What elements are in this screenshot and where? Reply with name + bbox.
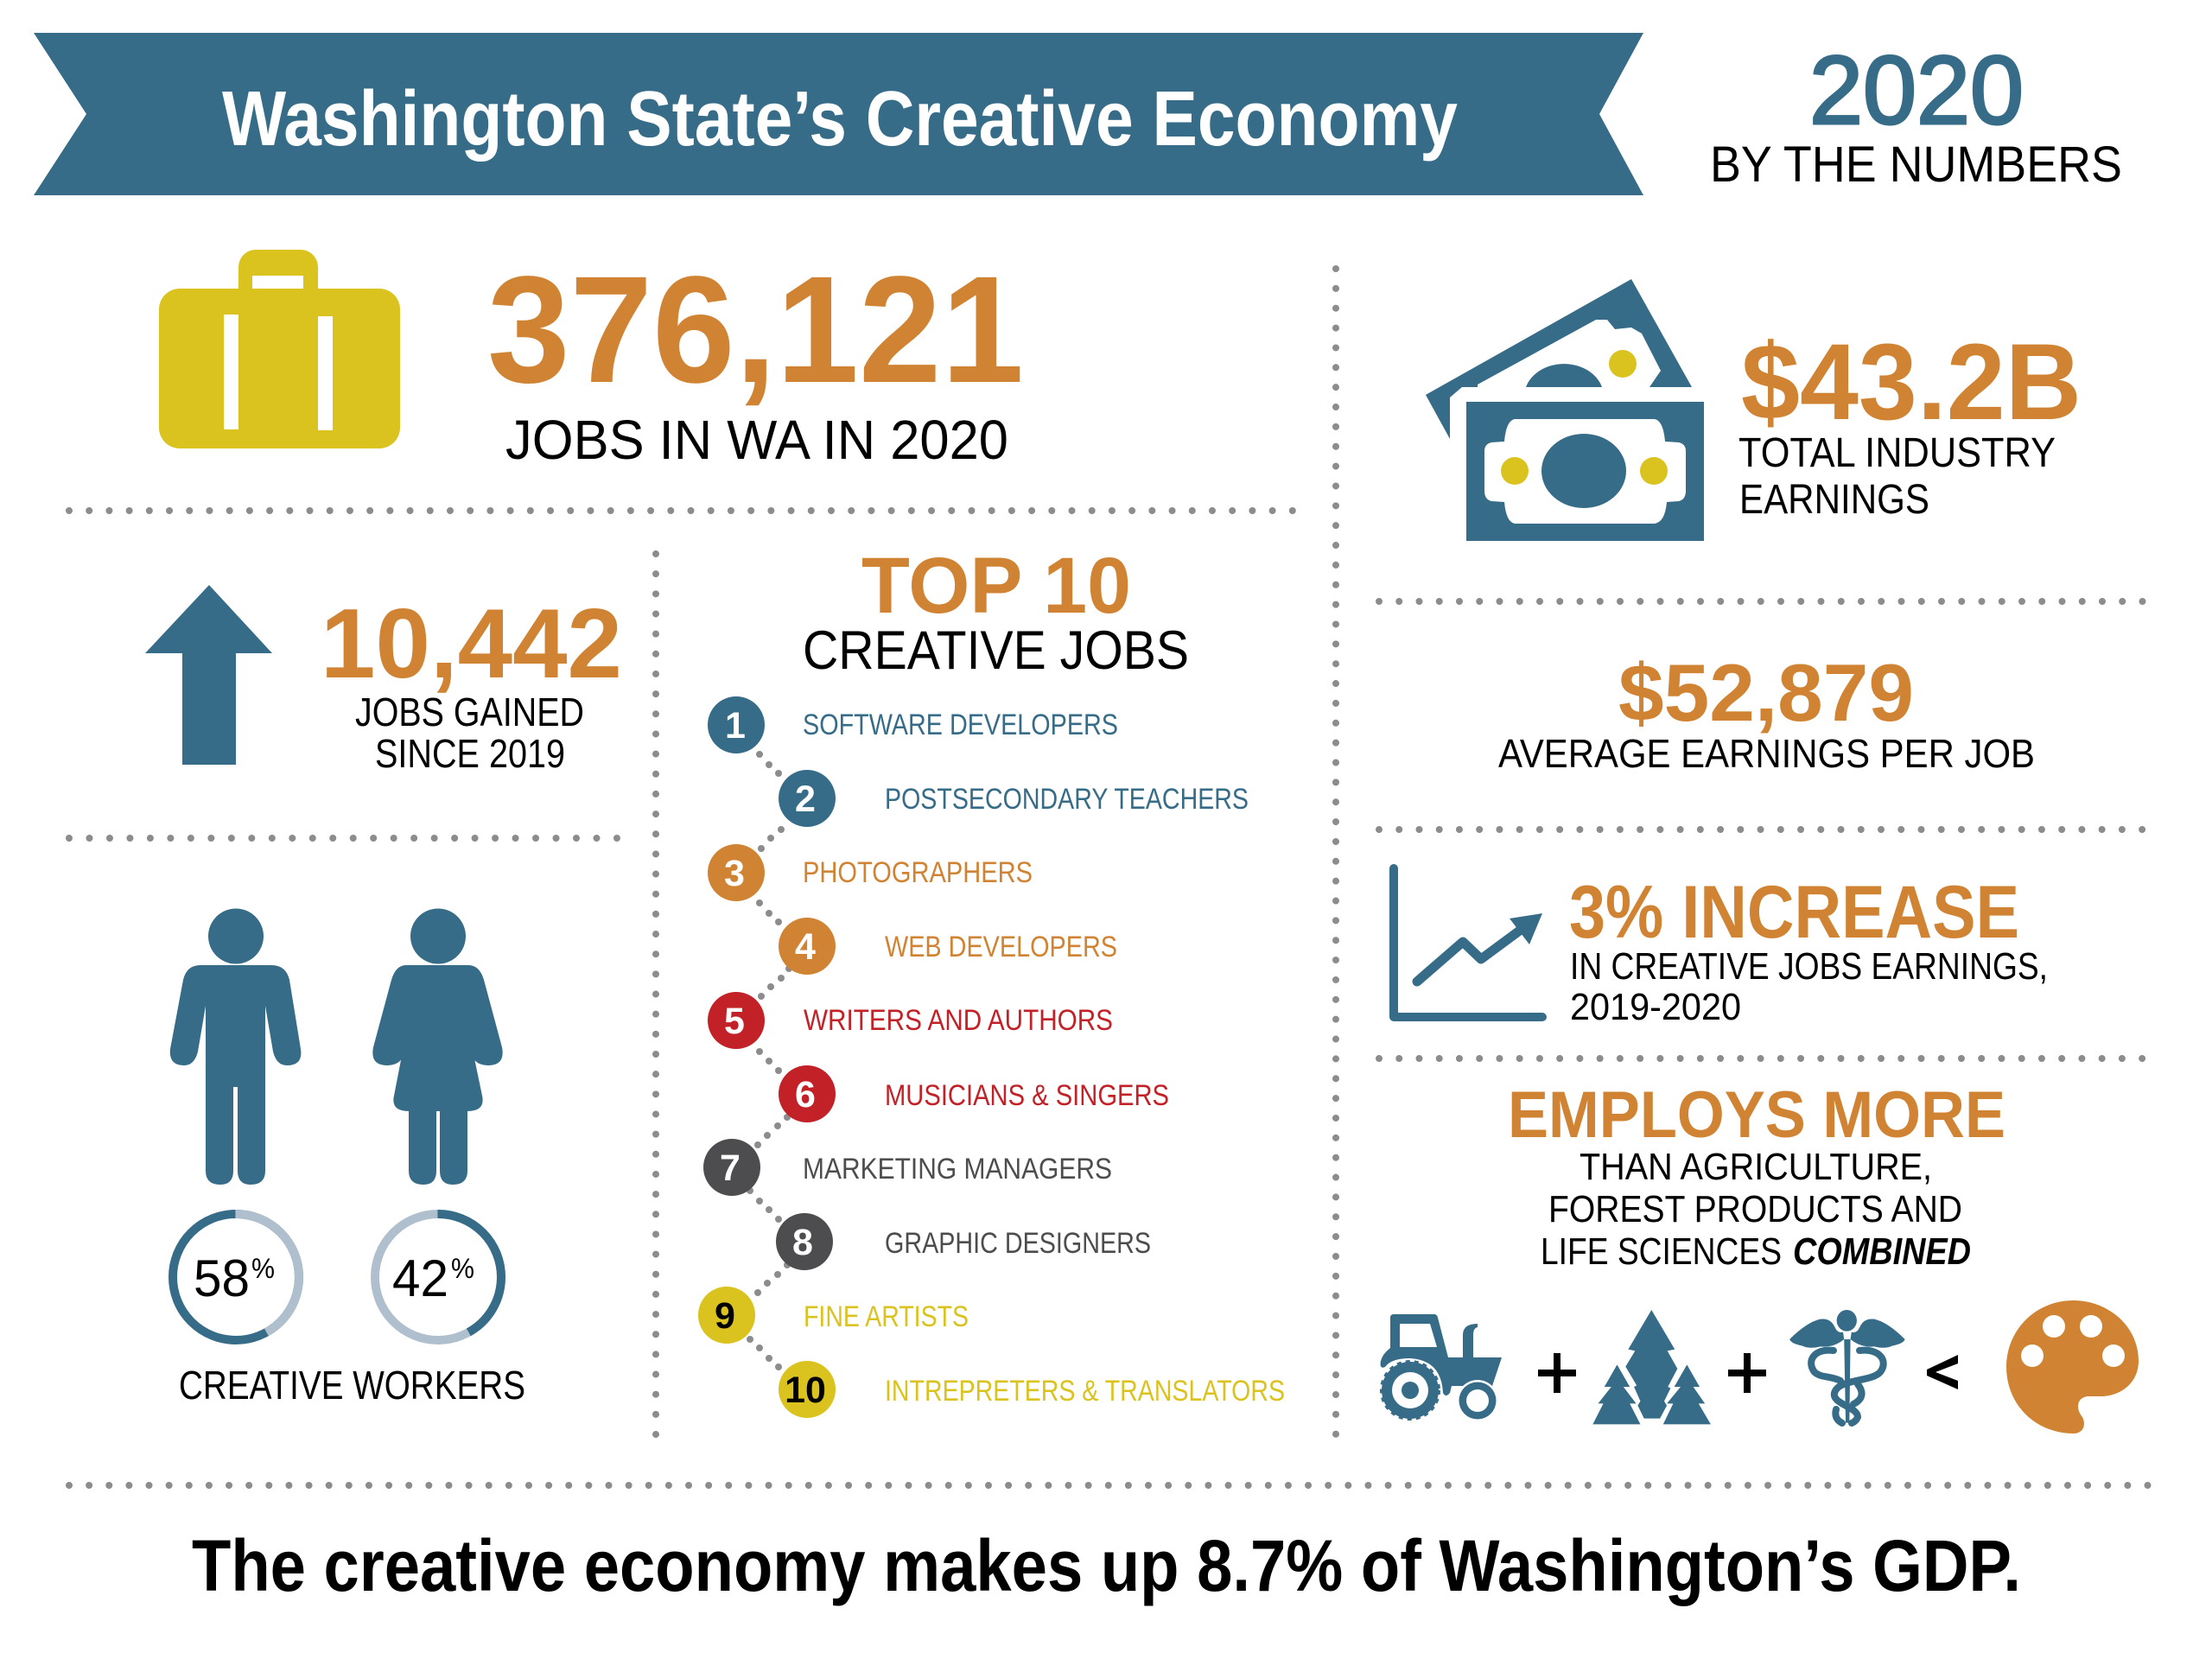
list item 9: 9 (715, 1295, 735, 1337)
list item 10 (779, 1361, 1285, 1418)
icon: tractor (1381, 1314, 1502, 1421)
list item 2 (779, 770, 1249, 827)
stat: total industry earnings: TOTAL INDUSTRY (1738, 430, 2056, 476)
text block: employs more: COMBINED (1793, 1230, 1971, 1273)
stat: 3 percent increase (1569, 871, 2048, 1028)
stat: jobs in WA: 376,121 (487, 245, 1024, 415)
text block: employs more: EMPLOYS MORE (1508, 1078, 2005, 1152)
text block: employs more: FOREST PRODUCTS AND (1548, 1188, 1962, 1230)
stat: average earnings per job: $52,879 (1618, 647, 1914, 738)
list item 7: MARKETING MANAGERS (803, 1153, 1112, 1185)
list item 10: INTREPRETERS & TRANSLATORS (885, 1375, 1285, 1408)
heading: top 10 creative jobs: CREATIVE JOBS (803, 620, 1189, 681)
connector dots for ranked list (747, 751, 792, 1370)
footer statement: The creative economy makes up 8.7% of Washington’s GDP. (192, 1525, 2021, 1606)
list item 6: 6 (795, 1074, 816, 1116)
icon: caduceus (1789, 1310, 1905, 1423)
list item 3: 3 (724, 853, 745, 894)
donut: 58 percent (173, 1214, 299, 1340)
list item 4: 4 (795, 926, 816, 968)
text block: employs more (1508, 1078, 2005, 1273)
stat: total industry earnings (1738, 322, 2082, 523)
icon: paint palette (2006, 1300, 2139, 1433)
year heading: 2020 by the numbers (1710, 36, 2122, 193)
icon: man (170, 909, 301, 1185)
list item 4 (779, 918, 1117, 975)
list item 8: 8 (792, 1222, 813, 1263)
operator: plus (1538, 1353, 1576, 1393)
heading: top 10 creative jobs (803, 542, 1189, 681)
stat: 3 percent increase: 2019-2020 (1570, 986, 1741, 1028)
stat: 3 percent increase: IN CREATIVE JOBS EARNINGS, (1570, 945, 2048, 988)
stat: jobs gained: 10,442 (321, 589, 622, 699)
list item 4: WEB DEVELOPERS (885, 931, 1117, 963)
list item 5: 5 (724, 1001, 745, 1042)
stat: average earnings per job (1498, 647, 2035, 776)
list item 5 (708, 992, 1113, 1049)
icon: money bills (1426, 279, 1704, 541)
list item 2: POSTSECONDARY TEACHERS (885, 783, 1249, 816)
list item 1 (708, 696, 1118, 753)
list item 7 (703, 1139, 1112, 1196)
donut: 42 percent: % (451, 1253, 474, 1284)
list item 2: 2 (795, 779, 816, 820)
list item 6 (779, 1065, 1169, 1122)
donut: 42 percent (375, 1214, 501, 1340)
stat: jobs in WA: JOBS IN WA IN 2020 (505, 409, 1008, 471)
donut: 58 percent: 58 (194, 1249, 250, 1307)
title banner (34, 33, 1643, 195)
heading: top 10 creative jobs: TOP 10 (861, 542, 1131, 630)
stat: total industry earnings: $43.2B (1741, 322, 2082, 442)
list item 9: FINE ARTISTS (804, 1300, 969, 1333)
stat: jobs gained: JOBS GAINED (355, 690, 584, 734)
list item 10: 10 (785, 1370, 826, 1411)
operator: less than (1927, 1355, 1958, 1389)
list item 5: WRITERS AND AUTHORS (804, 1004, 1113, 1037)
stat: average earnings per job: AVERAGE EARNINGS PER JOB (1498, 731, 2035, 776)
list item 1: 1 (725, 705, 746, 747)
icon: woman (372, 909, 503, 1185)
text block: employs more: LIFE SCIENCES (1541, 1230, 1782, 1273)
list item 7: 7 (720, 1147, 741, 1189)
year heading: 2020 by the numbers: 2020 (1809, 36, 2024, 144)
stat: 3 percent increase: 3% INCREASE (1569, 871, 2019, 954)
icon: line chart with arrow (1394, 868, 1542, 1017)
operator: plus (1728, 1353, 1766, 1393)
donut: 42 percent: 42 (392, 1249, 448, 1307)
text block: employs more: THAN AGRICULTURE, (1580, 1146, 1932, 1188)
label: creative workers: CREATIVE WORKERS (179, 1363, 525, 1408)
list item 3 (708, 844, 1033, 901)
stat: total industry earnings: EARNINGS (1739, 477, 1929, 523)
icon: trees (1592, 1310, 1711, 1424)
list item 8 (776, 1213, 1151, 1270)
donut: 58 percent: % (251, 1253, 275, 1284)
title banner: Washington State’s Creative Economy (222, 76, 1458, 162)
year heading: 2020 by the numbers: BY THE NUMBERS (1710, 137, 2122, 193)
list item 6: MUSICIANS & SINGERS (885, 1079, 1169, 1112)
stat: jobs gained (321, 589, 622, 776)
icon: suitcase (159, 250, 400, 448)
list item 3: PHOTOGRAPHERS (803, 856, 1033, 889)
list item 8: GRAPHIC DESIGNERS (885, 1227, 1151, 1260)
stat: jobs gained: SINCE 2019 (375, 731, 565, 776)
list item 1: SOFTWARE DEVELOPERS (803, 709, 1118, 741)
list item 9 (698, 1287, 969, 1344)
icon: up arrow (145, 585, 272, 765)
